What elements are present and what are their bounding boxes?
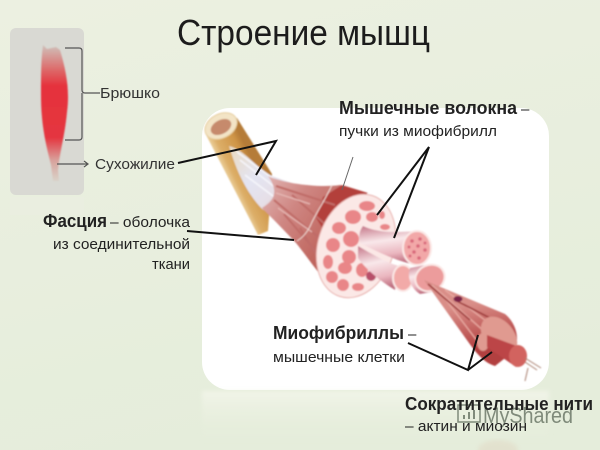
watermark: MyShared [483,403,573,428]
label: contractile filaments: Сократительные нити [405,394,593,414]
label: muscle fibres: Мышечные волокна [339,98,518,118]
muscle fibre [424,280,517,366]
leader: tendon [178,141,276,175]
cross section [303,184,409,308]
title: Строение мышц [177,12,430,53]
bone end [200,107,242,145]
fascicle 2 [358,246,399,290]
label: contractile filaments: – актин и миозин [405,418,527,435]
panel: white illustration card [202,108,549,390]
label: tendon: Сухожилие [95,156,175,173]
label: fascia: Фасция [43,211,107,231]
label: contractile filaments [405,394,593,435]
arrow: tendon [57,161,88,167]
reflection below card [202,391,549,450]
panel: muscle photo [10,28,84,215]
label: fascia: – оболочка [110,214,191,231]
label: myofibrils: Миофибриллы [273,323,404,343]
label: myofibrils [273,323,417,366]
bone [205,118,272,235]
leader: muscle fibres [377,147,429,238]
label: myofibrils: – [408,326,417,343]
label: muscle fibres [339,98,530,140]
label: fascia [43,211,191,273]
label: myofibrils: мышечные клетки [273,349,405,366]
illustration: muscle anatomy [200,107,541,381]
label: belly: Брюшко [100,85,160,102]
bracket: belly [65,48,100,140]
fascicle 3 [409,264,432,294]
label: muscle fibres: – [521,101,530,118]
icon: muscle specimen [41,45,68,181]
label: fascia: из соединительной [53,236,190,253]
leader: myofibrils [408,335,492,370]
leader: epimysium thin line [342,157,353,190]
label: fascia: ткани [152,256,190,273]
fibre tips [525,358,541,381]
fascicle 1 [359,226,417,265]
muscle outer wrap [316,185,368,232]
leader: fascia [187,231,294,240]
tendon [229,146,300,228]
label: muscle fibres: пучки из миофибрилл [339,123,497,140]
muscle belly [262,176,367,298]
